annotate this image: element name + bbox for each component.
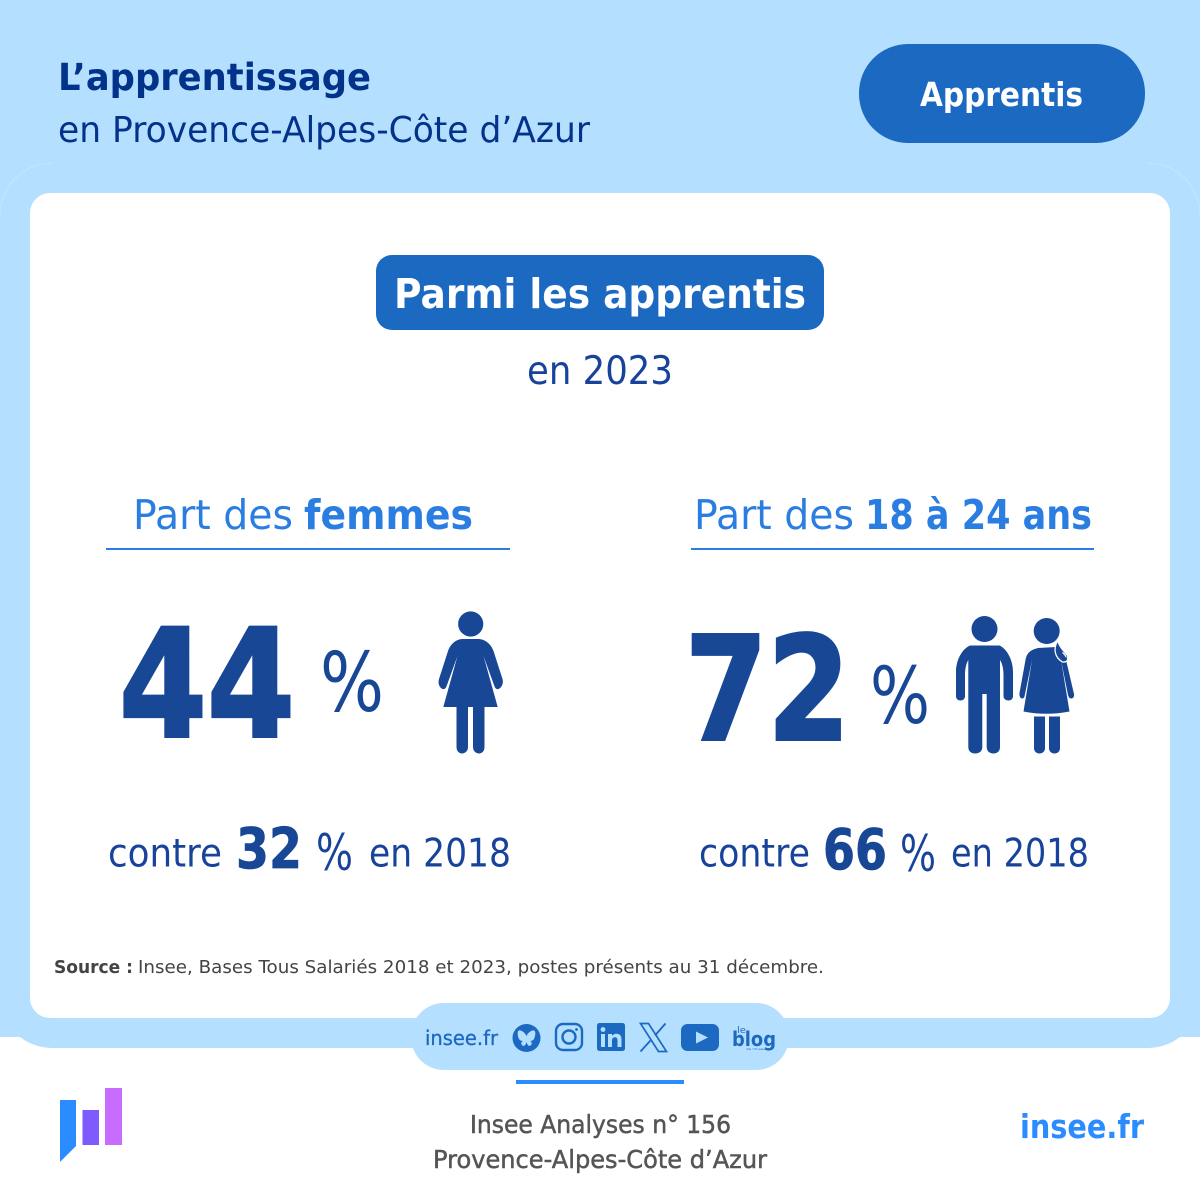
comparison: 18 à 24 ans 2018: 66 <box>823 818 887 883</box>
comparison: 18 à 24 ans 2018: % <box>900 825 936 883</box>
icon: instagram <box>556 1024 582 1050</box>
panel: social links pill <box>411 1003 789 1070</box>
title: en Provence-Alpes-Côte d’Azur <box>58 110 590 151</box>
icon: youtube <box>681 1024 719 1051</box>
stat: 72 %: % <box>870 652 930 742</box>
heading: Part des femmes <box>106 491 510 550</box>
badge: Apprentis: Apprentis <box>920 75 1083 114</box>
link: le blog: de l'Insee <box>746 1047 766 1051</box>
comparison: 18 à 24 ans 2018: en 2018 <box>951 832 1089 876</box>
comparison: femmes 2018: en 2018 <box>369 832 511 876</box>
title <box>58 56 590 151</box>
stat: 72 %: 72 <box>685 606 850 774</box>
source note: Source : <box>54 957 133 978</box>
heading: Part des 18 à 24 ans: Part des <box>694 491 854 539</box>
stat: 44 %: 44 <box>119 598 295 772</box>
icon: man and woman <box>956 616 1074 754</box>
icon: linkedin <box>597 1023 625 1051</box>
panel: outer frame <box>0 163 1200 1048</box>
publication reference: Provence-Alpes-Côte d’Azur <box>433 1145 768 1174</box>
heading: Part des 18 à 24 ans <box>691 491 1094 550</box>
publication reference: Insee Analyses n° 156 <box>470 1110 731 1139</box>
comparison: 18 à 24 ans 2018: contre <box>699 832 810 876</box>
heading: Part des 18 à 24 ans: 18 à 24 ans <box>865 491 1092 539</box>
heading: Parmi les apprentis <box>376 255 824 330</box>
comparison: femmes 2018: contre <box>108 832 222 876</box>
comparison: 18 à 24 ans 2018 <box>699 818 1089 883</box>
stat: 44 %: % <box>320 636 384 731</box>
link: insee.fr footer: insee.fr <box>1020 1107 1145 1146</box>
heading: Parmi les apprentis: Parmi les apprentis <box>394 270 806 318</box>
icon: X <box>640 1024 666 1052</box>
icon: woman <box>439 611 503 754</box>
source note: Insee, Bases Tous Salariés 2018 et 2023, postes présents au 31 décembre. <box>138 957 824 978</box>
icon: bluesky <box>512 1024 540 1052</box>
logo: Insee <box>60 1088 122 1162</box>
accent bar <box>516 1080 684 1084</box>
comparison: femmes 2018: 32 <box>236 817 302 882</box>
link: le blog: le <box>737 1026 747 1036</box>
link: insee.fr: insee.fr <box>425 1026 499 1050</box>
comparison: femmes 2018: % <box>316 824 353 882</box>
title: L’apprentissage <box>58 56 371 99</box>
comparison: femmes 2018 <box>108 817 511 882</box>
subheading: en 2023: en 2023 <box>527 349 673 394</box>
heading: Part des femmes: femmes <box>304 491 473 539</box>
publication reference <box>433 1110 768 1174</box>
heading: Part des femmes: Part des <box>133 491 293 539</box>
panel: main white card <box>30 193 1170 1018</box>
badge: Apprentis <box>859 44 1145 143</box>
link: le blog: blog <box>732 1027 776 1051</box>
